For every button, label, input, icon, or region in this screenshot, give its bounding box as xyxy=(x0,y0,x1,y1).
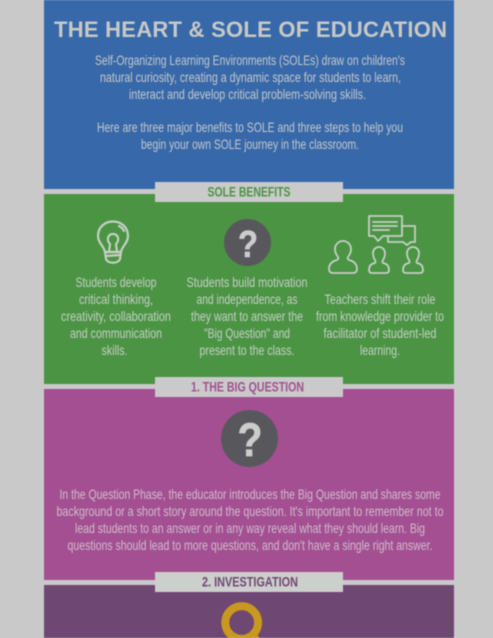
heading: the big question xyxy=(155,377,343,397)
benefit 1: critical thinking: and communication xyxy=(70,325,162,341)
benefit 2: motivation: they want to answer the xyxy=(191,308,303,324)
title: THE HEART & SOLE OF EDUCATION xyxy=(54,17,447,42)
benefit 3: teachers: learning. xyxy=(360,342,400,358)
benefit 3: teachers: Teachers shift their role xyxy=(324,291,436,307)
benefit 2: motivation xyxy=(186,219,308,358)
intro text: natural curiosity, creating a dynamic space for students to learn, xyxy=(100,69,401,85)
benefit 3: teachers xyxy=(316,216,444,358)
benefit 2: motivation: present to the class. xyxy=(200,342,294,358)
icon: magnifying glass xyxy=(225,606,258,638)
question phase text xyxy=(56,486,444,553)
benefit 3: teachers: facilitator of student-led xyxy=(324,325,436,341)
panel: investigation xyxy=(44,585,454,638)
intro text: interact and develop critical problem-solving skills. xyxy=(129,86,366,102)
benefit 1: critical thinking: skills. xyxy=(102,342,128,358)
icon: question mark: ? xyxy=(238,413,262,466)
benefit 1: critical thinking xyxy=(61,222,171,358)
icon: light bulb xyxy=(98,222,128,263)
heading: SOLE benefits: SOLE BENEFITS xyxy=(208,184,290,200)
icon: question mark: ? xyxy=(238,224,258,266)
benefit 2: motivation: "Big Question" and xyxy=(204,325,290,341)
intro text: begin your own SOLE journey in the classroom. xyxy=(141,136,359,152)
heading: investigation xyxy=(155,572,343,592)
heading: SOLE benefits xyxy=(155,182,343,202)
heading: investigation: 2. INVESTIGATION xyxy=(202,574,298,590)
benefit 3: teachers: from knowledge provider to xyxy=(316,308,444,324)
icon: people with speech bubbles xyxy=(329,216,423,273)
benefit 1: critical thinking: creativity, collaboration xyxy=(61,308,171,324)
benefit 2: motivation: and independence, as xyxy=(196,291,298,307)
benefit 1: critical thinking: critical thinking, xyxy=(79,291,153,307)
panel: introduction xyxy=(44,0,454,189)
icon: question mark xyxy=(221,410,278,467)
panel: SOLE benefits xyxy=(44,194,454,384)
panel: the big question xyxy=(44,389,454,580)
intro text xyxy=(95,52,405,152)
benefit 1: critical thinking: Students develop xyxy=(76,274,157,290)
benefit 2: motivation: Students build motivation xyxy=(186,274,308,290)
heading: the big question: 1. THE BIG QUESTION xyxy=(191,378,304,394)
